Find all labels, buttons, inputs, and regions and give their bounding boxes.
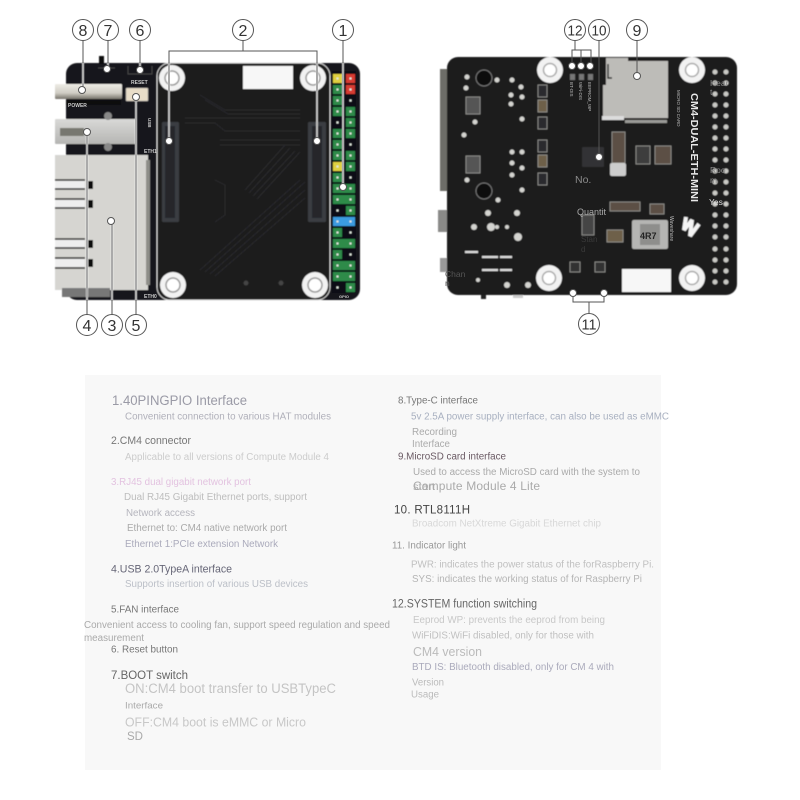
item 11	[392, 541, 654, 585]
callout numbers: right: 9	[633, 23, 642, 40]
fan connector	[126, 88, 148, 101]
item 4: 4.USB 2.0TypeA interface	[111, 564, 232, 576]
callouts: right board	[572, 41, 637, 313]
brand: Waveshare	[668, 216, 674, 241]
item 8	[398, 396, 669, 450]
item 5: Convenient access to cooling fan, support speed regulation and speed	[84, 620, 390, 631]
stray overlay labels: n	[445, 278, 450, 288]
item 12: WiFiDIS:WiFi disabled, only for those with	[412, 631, 594, 642]
stray overlay labels: Roo	[710, 165, 726, 175]
item 3: Ethernet 1:PCIe extension Network	[125, 539, 279, 550]
inductor marking: 4R7	[640, 231, 657, 241]
item 7	[111, 670, 336, 743]
left board silk labels: POWER	[68, 103, 87, 109]
side connector edges	[440, 69, 447, 191]
CM4 connectors	[162, 122, 326, 222]
callout numbers: left: 3	[108, 318, 117, 335]
callout numbers: right: 10	[592, 22, 606, 40]
round vias	[476, 70, 492, 86]
right board photo	[438, 57, 737, 299]
left board silk labels: RESET	[131, 80, 148, 86]
silk labels: BT-DIS	[569, 82, 574, 97]
stray overlay labels: m	[710, 175, 717, 185]
item 9: Used to access the MicroSD card with the system to	[413, 467, 640, 478]
item 7: Interface	[125, 700, 163, 712]
item 10	[394, 505, 601, 530]
callout numbers: right: 11	[582, 316, 596, 334]
item 3: Ethernet to: CM4 native network port	[127, 523, 287, 534]
text block: right column	[392, 396, 669, 701]
callout numbers: left: 7	[104, 23, 113, 40]
board base	[447, 57, 737, 295]
micro SD slot	[602, 58, 668, 123]
mounting holes	[536, 57, 705, 291]
notch switch	[99, 56, 104, 64]
item 4	[111, 564, 308, 590]
SMD pads	[466, 74, 671, 272]
panel: specification background	[85, 375, 661, 770]
top edge parts	[98, 66, 152, 74]
stray overlay labels: No.	[575, 174, 591, 186]
callout dots: left	[78, 66, 346, 224]
stray overlay labels: Yes	[709, 197, 723, 207]
item 1: Convenient connection to various HAT modules	[125, 412, 331, 422]
stray overlay labels: d	[581, 245, 585, 254]
stray overlay labels: Chan	[445, 269, 466, 279]
callout numbers: left	[72, 20, 354, 336]
item 5: 5.FAN interface	[111, 604, 179, 616]
board base	[66, 63, 360, 300]
usb connector	[55, 112, 136, 151]
callout numbers: left: 5	[132, 318, 141, 335]
stray overlay labels: Stan	[581, 235, 597, 244]
item 12: Eeprod WP: prevents the eeprod from being	[413, 615, 605, 626]
callout numbers: left: 6	[136, 23, 145, 40]
item 2: 2.CM4 connector	[111, 435, 191, 447]
item 9: Compute Module 4 Lite	[413, 479, 540, 493]
callout numbers: left: 2	[239, 23, 248, 40]
item 4: Supports insertion of various USB devices	[125, 579, 308, 590]
item 12	[392, 599, 614, 701]
silk labels: MICRO SD CARD	[676, 90, 681, 127]
item 1: 1.40PINGPIO Interface	[112, 393, 247, 408]
callouts: left board	[83, 41, 343, 315]
RJ45 connector	[55, 155, 150, 297]
RTL8111H chip	[582, 147, 604, 167]
mounting holes	[159, 65, 328, 298]
item 3: 3.RJ45 dual gigabit network port	[111, 477, 251, 488]
callout numbers: right	[564, 20, 648, 334]
left board silk labels: ETH0	[144, 294, 157, 300]
item 12: Version	[412, 678, 444, 689]
text block: left column	[84, 393, 390, 743]
white label	[243, 66, 293, 89]
logo: waveshare	[684, 217, 699, 236]
silk labels	[569, 82, 681, 127]
item 10: Broadcom NetXtreme Gigabit Ethernet chip	[412, 519, 601, 530]
through-hole pads	[462, 74, 531, 288]
callout numbers: left: 8	[79, 23, 88, 40]
inductor	[632, 220, 668, 249]
item 8: Interface	[412, 439, 450, 450]
left board silk labels: ETH1	[144, 149, 157, 155]
item 3: Network access	[126, 508, 195, 519]
item 9: start	[413, 482, 435, 493]
item 1	[112, 393, 331, 422]
leader lines	[572, 41, 637, 313]
bottom switches	[465, 252, 512, 270]
callout numbers: right: 12	[568, 22, 582, 40]
right board text	[445, 78, 729, 288]
item 10: 10. RTL8111H	[394, 505, 470, 517]
header solder pads	[712, 70, 728, 284]
stray overlay labels: Hear	[710, 78, 729, 88]
item 2	[111, 435, 329, 463]
item 3: Dual RJ45 Gigabit Ethernet ports, support	[124, 492, 307, 503]
power connector	[55, 84, 122, 105]
silk labels: WiFi-DIS	[578, 82, 583, 100]
item 11: PWR: indicates the power status of the forRaspberry Pi.	[411, 560, 654, 571]
item 7: ON:CM4 boot transfer to USBTypeC	[125, 681, 336, 696]
small vias	[244, 280, 248, 286]
stray overlay labels: Quantit	[577, 207, 607, 217]
item 5: measurement	[84, 633, 144, 644]
GPIO header	[332, 71, 356, 293]
callout numbers: left: 4	[83, 318, 92, 335]
item 9: 9.MicroSD card interface	[398, 452, 506, 462]
callout dots: right	[568, 62, 640, 296]
item 12: 12.SYSTEM function switching	[392, 599, 537, 611]
item 8: 8.Type-C interface	[398, 396, 478, 406]
white label	[622, 269, 671, 292]
stray overlay labels: t	[710, 87, 713, 97]
item 7: SD	[127, 729, 143, 743]
stray overlay labels	[445, 78, 729, 288]
board model name: CM4-DUAL-ETH-MINI	[688, 93, 700, 202]
item 5	[84, 604, 390, 644]
item 11: 11. Indicator light	[392, 541, 466, 552]
item 8: Recording	[412, 427, 457, 438]
item 12: BTD IS: Bluetooth disabled, only for CM 4 with	[412, 662, 614, 673]
item 3	[111, 477, 307, 550]
callout numbers: left: 1	[339, 23, 348, 40]
silk labels: EEPROM_WP	[587, 82, 592, 111]
left board silk labels: USB	[147, 118, 152, 128]
item 7: OFF:CM4 boot is eMMC or Micro	[125, 716, 306, 730]
left board silk labels: GPIO	[339, 294, 349, 299]
PCB traces	[185, 95, 305, 276]
item 2: Applicable to all versions of Compute Module 4	[125, 452, 329, 463]
item 11: SYS: indicates the working status of for Raspberry Pi	[412, 574, 642, 585]
item 12: Usage	[411, 690, 439, 701]
item 7: 7.BOOT switch	[111, 670, 188, 682]
item 6: 6. Reset button	[111, 644, 178, 656]
left board photo	[55, 56, 360, 300]
item 12: CM4 version	[413, 645, 482, 659]
item 8: 5v 2.5A power supply interface, can also be used as eMMC	[411, 412, 669, 422]
item 9	[398, 452, 640, 493]
leader lines	[83, 63, 343, 300]
left board silk labels	[68, 80, 349, 300]
